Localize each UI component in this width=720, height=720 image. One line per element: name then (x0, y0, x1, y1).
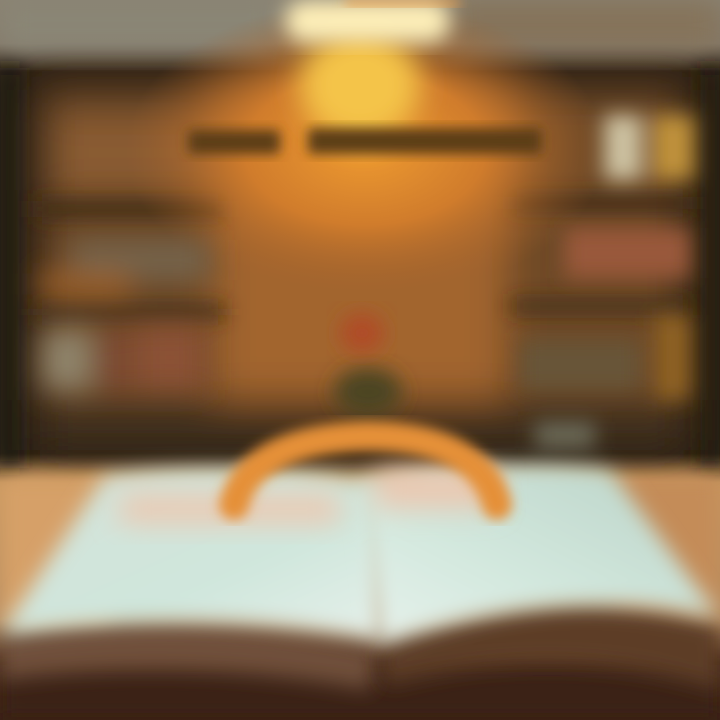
background wall (0, 0, 720, 50)
blurred heading band (188, 128, 542, 154)
pink text tint on pages (120, 470, 495, 523)
wooden desk (0, 476, 720, 626)
open book (0, 436, 720, 720)
ceiling lamp (285, 0, 460, 140)
orange light glow (152, 21, 588, 268)
bookshelf frame (0, 68, 720, 468)
shelf back panel (40, 90, 682, 450)
shelf boards (35, 195, 690, 319)
orange ribbon bookmark (234, 436, 497, 505)
left page (0, 469, 380, 640)
flower decoration (334, 313, 402, 416)
book cover and shadow (16, 672, 655, 688)
books on right shelves (520, 115, 694, 448)
books on left shelves (40, 240, 210, 390)
right page (360, 465, 720, 645)
page edges, right (380, 605, 720, 690)
page edges, left (0, 623, 378, 690)
